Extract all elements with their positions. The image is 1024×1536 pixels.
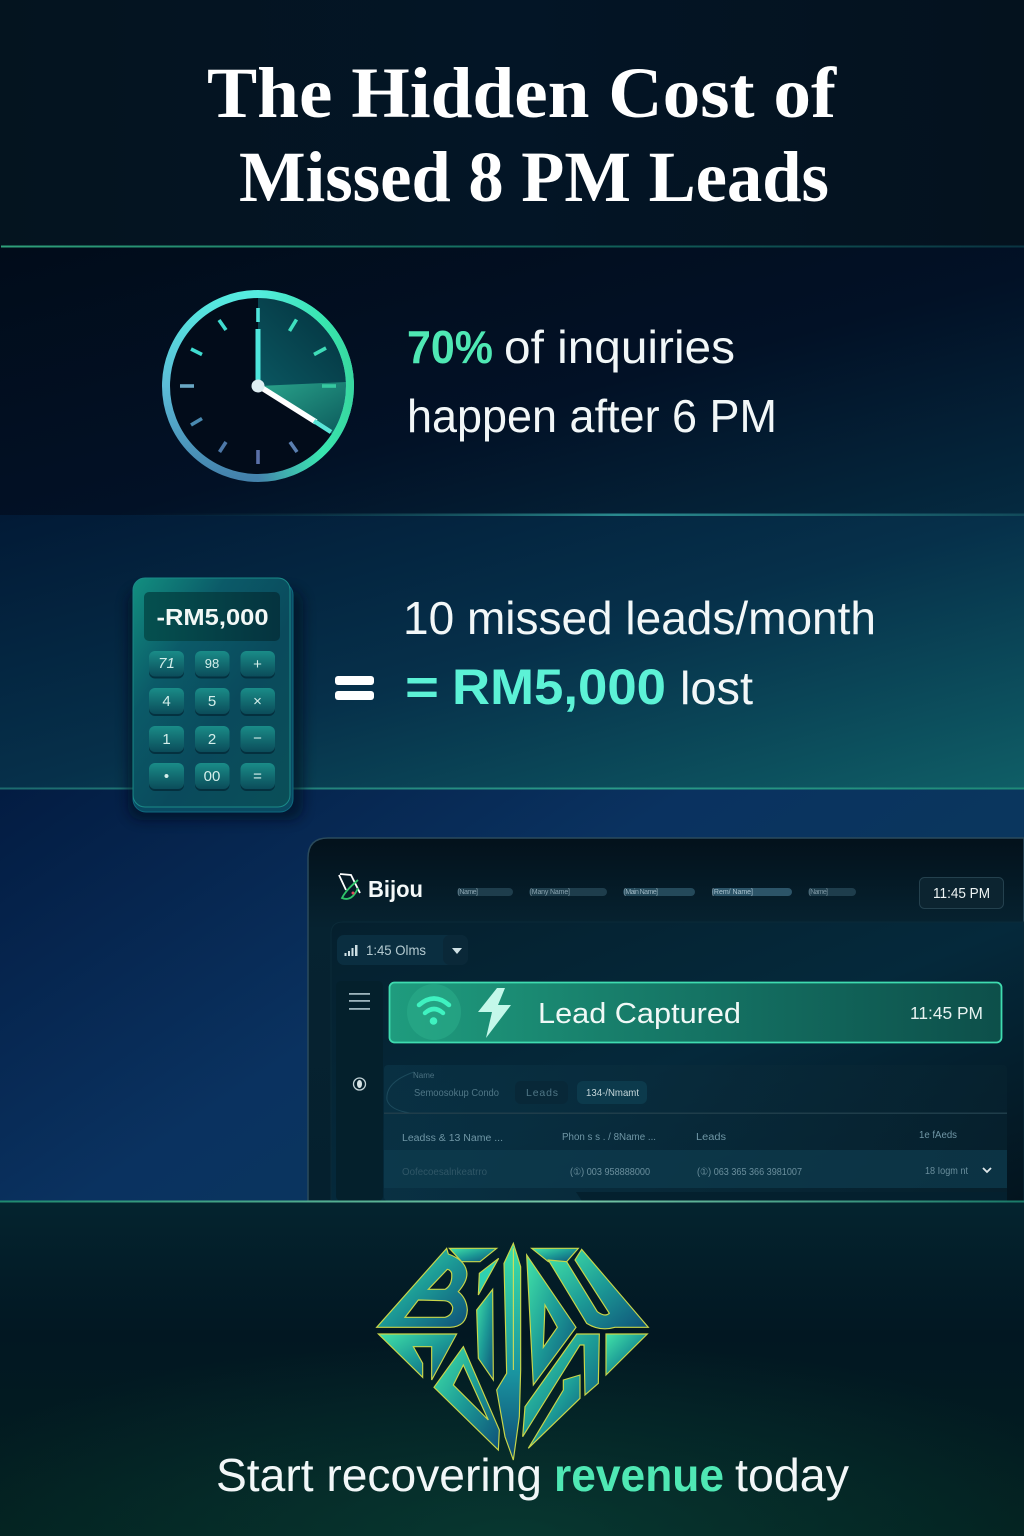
- dashboard inner panel: [331, 922, 1024, 1201]
- table row: (①) 063 365 366 3981007: [697, 1167, 802, 1178]
- calculator keys: +: [253, 656, 262, 673]
- calculator keys: ×: [253, 693, 262, 710]
- logo: Bijou diamond: [377, 1243, 648, 1460]
- table header: 1e fAeds: [919, 1130, 957, 1141]
- dashboard nav items: [Name]: [458, 889, 478, 896]
- leads table: Leads: [526, 1087, 558, 1099]
- calculator body: [133, 578, 290, 807]
- hour hand: [262, 388, 331, 432]
- dashboard nav items: [457, 888, 856, 896]
- logo lower left facet: [378, 1334, 457, 1380]
- table header: Phon s s . / 8Name ...: [562, 1132, 656, 1143]
- logo spine highlight: [512, 1248, 515, 1370]
- clock elapsed wedge: [258, 298, 346, 386]
- calculator keys: =: [253, 768, 262, 785]
- wifi icon: [407, 984, 461, 1040]
- time badge: 11:45 PM: [933, 886, 990, 902]
- stat: inquiries text: happen after 6 PM: [407, 390, 777, 442]
- table header: Leads: [696, 1132, 726, 1143]
- dashboard nav items: [Many Name]: [530, 889, 570, 896]
- logo letter D: [527, 1255, 576, 1385]
- clock ring: [166, 294, 350, 478]
- calculator keys: [149, 651, 275, 791]
- status chip: 1:45 Olms: [366, 942, 426, 958]
- title: Missed 8 PM Leads: [239, 137, 829, 217]
- logo lower right stroke: [528, 1375, 580, 1448]
- calculator keys: −: [253, 730, 262, 747]
- calculator keys: 5: [208, 693, 216, 710]
- dashboard nav items: [Rem/ Name]: [712, 889, 753, 896]
- logo shard: [478, 1258, 499, 1295]
- dashboard brand: Bijou: [368, 876, 423, 902]
- logo letter U: [548, 1249, 648, 1329]
- sidebar: [336, 981, 383, 1201]
- call to action: today: [735, 1449, 849, 1501]
- table row: (①) 003 958888000: [570, 1167, 650, 1178]
- calculator keys: 4: [162, 693, 171, 710]
- call to action: revenue: [554, 1449, 724, 1501]
- stat: missed leads text: 10 missed leads/month: [403, 592, 876, 644]
- leads table: Semoosokup Condo: [414, 1087, 499, 1099]
- stat: missed leads text: =: [405, 659, 439, 715]
- calculator keys: •: [164, 768, 169, 785]
- leads table: Name: [413, 1071, 435, 1080]
- calculator base: [133, 582, 293, 812]
- stat: missed leads text: [403, 592, 876, 715]
- status chip: [337, 935, 468, 965]
- calculator keys: 2: [208, 731, 216, 748]
- lightning icon: [478, 988, 511, 1038]
- clock hub: [252, 380, 264, 392]
- dashboard nav items: [Main Name]: [624, 889, 658, 896]
- clock highlighted wedge: [258, 382, 346, 434]
- lead captured banner: Lead Captured: [538, 998, 741, 1030]
- logo letter B: [377, 1248, 467, 1327]
- title: [207, 53, 837, 217]
- title: The Hidden Cost of: [207, 53, 837, 133]
- table row: [384, 1150, 1007, 1188]
- clock ticks: [180, 308, 336, 464]
- leads table: 134-/Nmamt: [586, 1087, 639, 1099]
- stat: inquiries text: 70%: [407, 321, 493, 373]
- calculator keys: 71: [158, 655, 175, 672]
- logo center spine: [497, 1243, 521, 1460]
- call to action: [216, 1449, 849, 1501]
- logo top right bar: [532, 1248, 578, 1262]
- stat: inquiries text: of inquiries: [504, 321, 735, 373]
- table header: Leadss & 13 Name ...: [402, 1133, 503, 1144]
- stat: missed leads text: lost: [680, 662, 753, 714]
- calculator display: [144, 592, 280, 641]
- panel: dashboard: [308, 838, 1024, 1201]
- calculator keys: 98: [205, 656, 219, 671]
- table row: Oofecoesalnkeatrro: [402, 1167, 487, 1178]
- lead captured banner: 11:45 PM: [910, 1003, 983, 1023]
- call to action: Start recovering: [216, 1449, 542, 1501]
- leads table: [384, 1065, 1007, 1201]
- stat: inquiries text: [407, 321, 777, 442]
- calculator keys: 00: [204, 768, 220, 785]
- time badge: [920, 878, 1004, 908]
- dashboard nav items: [Name]: [809, 889, 828, 896]
- calculator display: -RM5,000: [156, 604, 268, 630]
- table row: 18 Iogm nt: [925, 1166, 968, 1177]
- logo right facet: [606, 1334, 647, 1375]
- equals sign: [335, 676, 374, 700]
- table header: [402, 1130, 957, 1144]
- logo top left bar: [449, 1248, 497, 1262]
- icon: clock: [166, 294, 350, 478]
- logo lower right letter: [523, 1334, 599, 1437]
- minute hand: [256, 329, 260, 386]
- icon: calculator: [128, 578, 303, 820]
- stat: missed leads text: RM5,000: [452, 659, 666, 715]
- lead captured banner: [390, 982, 1002, 1042]
- logo lower left letter: [434, 1347, 499, 1450]
- dashboard brand: [339, 874, 423, 902]
- logo letter I: [477, 1289, 493, 1380]
- calculator keys: 1: [162, 731, 171, 748]
